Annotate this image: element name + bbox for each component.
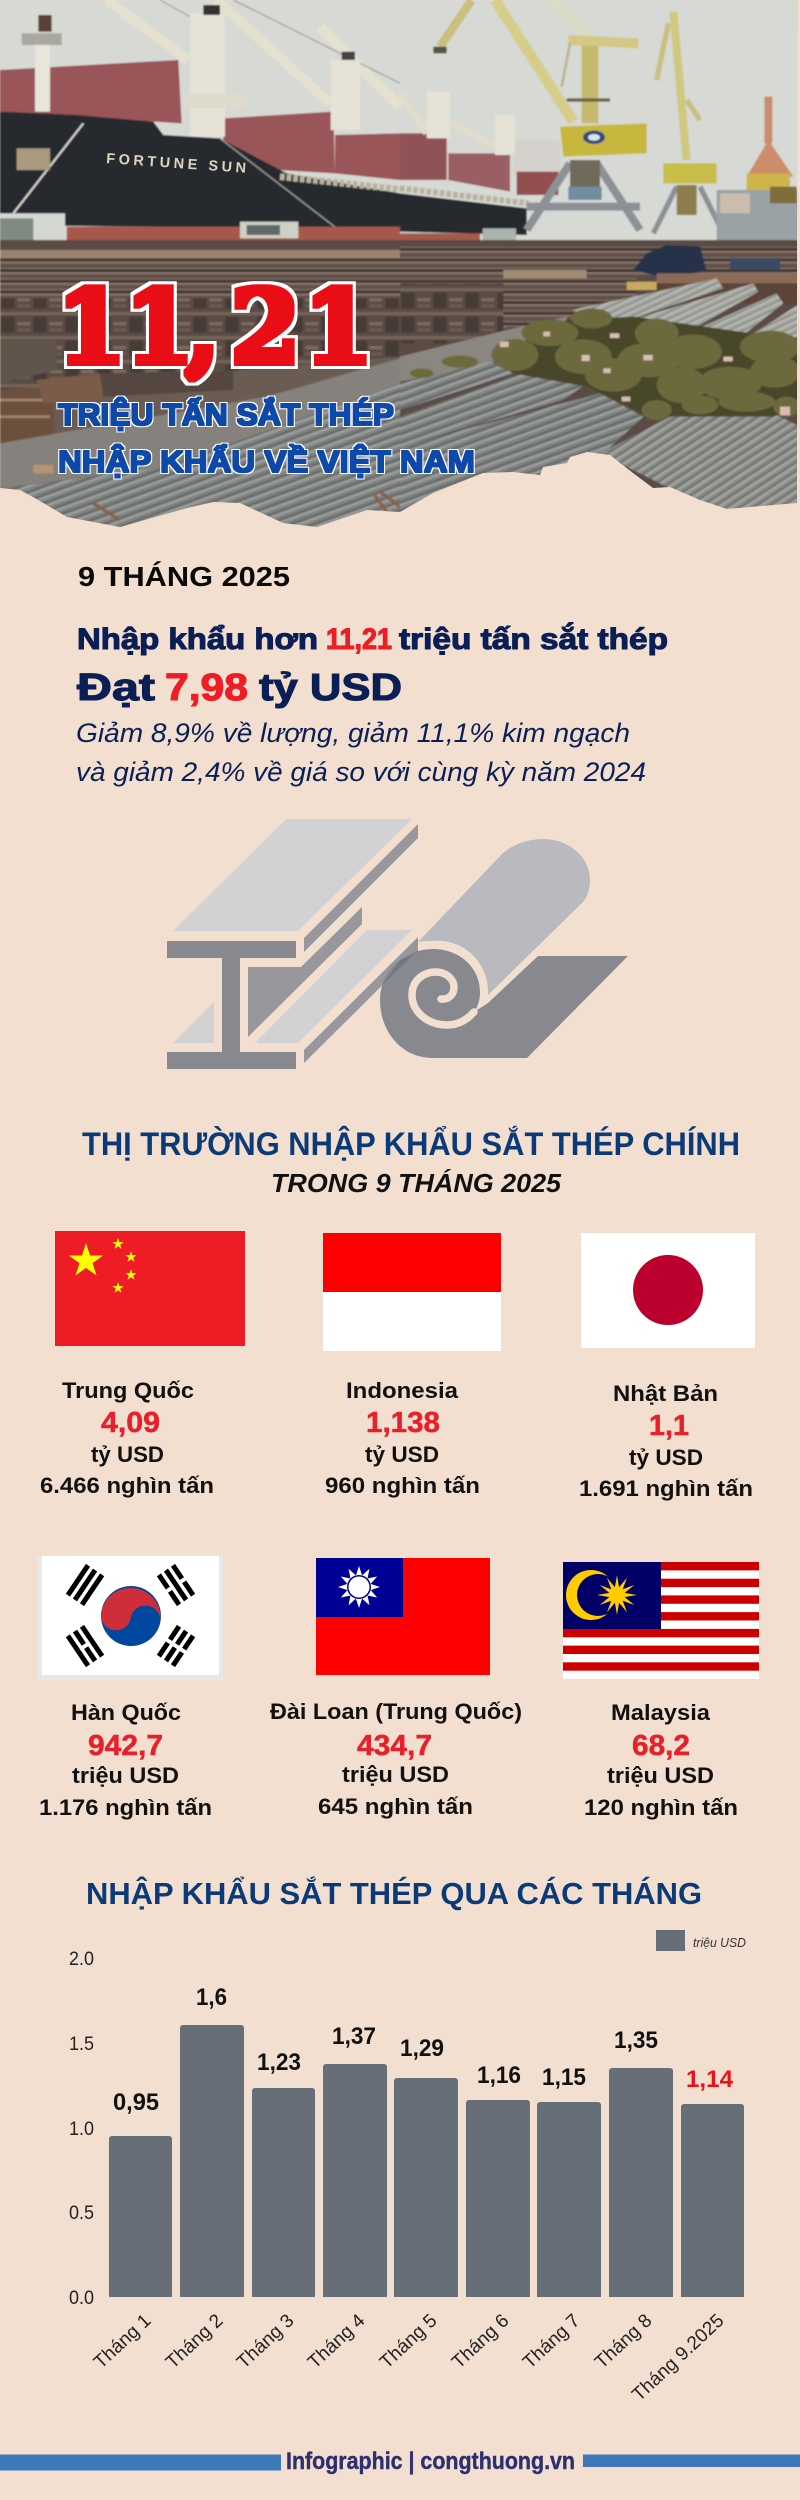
bars [109,2025,744,2297]
South Korea figures: triệu USD [72,1763,179,1788]
market: Malaysia [563,1562,759,1820]
Indonesia figures: tỷ USD [365,1442,439,1467]
value labels: 1,29 [400,2035,444,2062]
summary line: value: 7,98 [165,667,248,709]
hero photo: port with ship, cranes and steel [0,0,800,545]
y axis labels [69,1949,94,2309]
headline line 1: TRIỆU TẤN SẮT THÉP [58,396,394,432]
Taiwan figures [270,1699,522,1819]
summary line: volume: 11,21 [326,623,392,656]
China figures: Trung Quốc [62,1378,194,1403]
x axis labels: Tháng 6 [448,2310,513,2373]
bundle ends [500,317,800,417]
lower rod piles [400,362,513,410]
torn paper edge [0,0,800,545]
value labels: 1,16 [477,2062,521,2089]
Malaysia figures: triệu USD [607,1763,714,1788]
flag: Japan [581,1233,755,1348]
value labels: 1,23 [257,2049,301,2076]
summary line: value [77,667,402,709]
South Korea figures: Hàn Quốc [71,1700,181,1725]
Taiwan figures: triệu USD [342,1762,449,1787]
hero text block [56,268,475,479]
section heading: monthly chart: NHẬP KHẨU SẮT THÉP QUA CÁC THÁNG [86,1875,702,1911]
market: Taiwan [270,1558,522,1819]
summary line: volume [77,622,668,656]
y axis labels: 0.5 [69,2203,94,2224]
South Korea figures: 1.176 nghìn tấn [39,1795,212,1820]
section heading: main markets [82,1126,740,1198]
market: South Korea [37,1555,223,1820]
y axis labels: 0.0 [69,2288,94,2309]
ship name: FORTUNE SUN [106,151,246,177]
period label: 9 THÁNG 2025 [78,561,290,592]
Taiwan figures: Đài Loan (Trung Quốc) [270,1699,522,1724]
big number 11,21: 11,21 [56,268,374,388]
China figures: 4,09 [101,1407,160,1439]
value labels: 0,95 [113,2089,159,2116]
China figures [40,1378,214,1498]
y axis labels: 2.0 [69,1949,94,1970]
Indonesia figures: 960 nghìn tấn [325,1473,480,1498]
upper rod bundles [572,278,723,325]
quay right half: stacks, rods and bundles [400,240,800,530]
Indonesia figures: 1,138 [366,1407,440,1439]
Japan figures: Nhật Bản [613,1381,718,1406]
x axis labels: Tháng 3 [233,2310,298,2373]
summary line: value: Đạt [77,667,155,709]
Japan figures: tỷ USD [629,1445,703,1470]
change description: Giảm 8,9% về lượng, giảm 11,1% kim ngạch [76,718,630,748]
flag: South Korea [37,1555,223,1680]
Japan figures [579,1381,753,1501]
Malaysia figures: 68,2 [632,1730,690,1762]
value labels [113,1984,734,2116]
South Korea figures: 942,7 [88,1730,163,1762]
x axis labels: Tháng 5 [376,2310,441,2373]
x axis labels: Tháng 9.2025 [628,2310,728,2406]
legend: triệu USD [693,1935,746,1950]
value labels: 1,6 [196,1984,227,2011]
value labels: 1,15 [542,2064,586,2091]
change description: và giảm 2,4% về giá so với cùng kỳ năm 2024 [76,757,646,787]
beam [167,819,418,1069]
flag: Taiwan [316,1558,490,1675]
y axis labels: 1.0 [69,2119,94,2140]
China figures: tỷ USD [91,1442,164,1467]
icon: steel beam and rolled sheet [167,819,628,1069]
Indonesia figures [325,1378,480,1498]
x axis labels: Tháng 7 [519,2310,584,2373]
Japan figures: 1.691 nghìn tấn [579,1476,753,1501]
y axis labels: 1.5 [69,2034,94,2055]
ship, left half [0,0,400,250]
Malaysia figures: 120 nghìn tấn [584,1795,738,1820]
value labels: 1,37 [332,2023,376,2050]
section subheading: TRONG 9 THÁNG 2025 [271,1168,562,1198]
summary line: value: tỷ USD [259,667,402,709]
value labels: 1,14 [686,2066,734,2093]
market: China [40,1231,245,1498]
x axis labels: Tháng 1 [90,2310,155,2373]
footer [0,2448,800,2475]
Malaysia figures [584,1700,738,1820]
x axis labels: Tháng 2 [162,2310,227,2373]
section heading: main markets: THỊ TRƯỜNG NHẬP KHẨU SẮT THÉP CHÍNH [82,1126,740,1162]
flag: China [55,1231,245,1346]
market: Indonesia [323,1233,501,1498]
legend [656,1930,746,1951]
x axis labels [90,2310,728,2406]
Taiwan figures: 645 nghìn tấn [318,1794,473,1819]
change description [76,718,646,787]
market: Japan [579,1233,755,1501]
summary block [76,622,668,787]
China figures: 6.466 nghìn tấn [40,1473,214,1498]
x axis labels: Tháng 4 [304,2310,370,2373]
bar chart [69,1930,746,2406]
x axis labels: Tháng 8 [591,2310,656,2373]
summary line: volume: Nhập khẩu hơn [77,623,318,656]
quay left half: stacked sheet piles and road [0,240,400,530]
Japan figures: 1,1 [649,1410,689,1442]
flag: Malaysia [563,1562,759,1679]
South Korea figures [39,1700,212,1820]
ship right half and cranes [400,0,800,242]
Taiwan figures: 434,7 [357,1730,432,1762]
roll [380,839,628,1058]
value labels: 1,35 [614,2027,658,2054]
flag: Indonesia [323,1233,501,1351]
summary line: volume: triệu tấn sắt thép [399,622,668,656]
footer credit: Infographic | congthuong.vn [286,2448,575,2475]
Malaysia figures: Malaysia [611,1700,711,1725]
Indonesia figures: Indonesia [346,1378,459,1403]
headline line 2: NHẬP KHẨU VỀ VIỆT NAM [58,443,475,479]
